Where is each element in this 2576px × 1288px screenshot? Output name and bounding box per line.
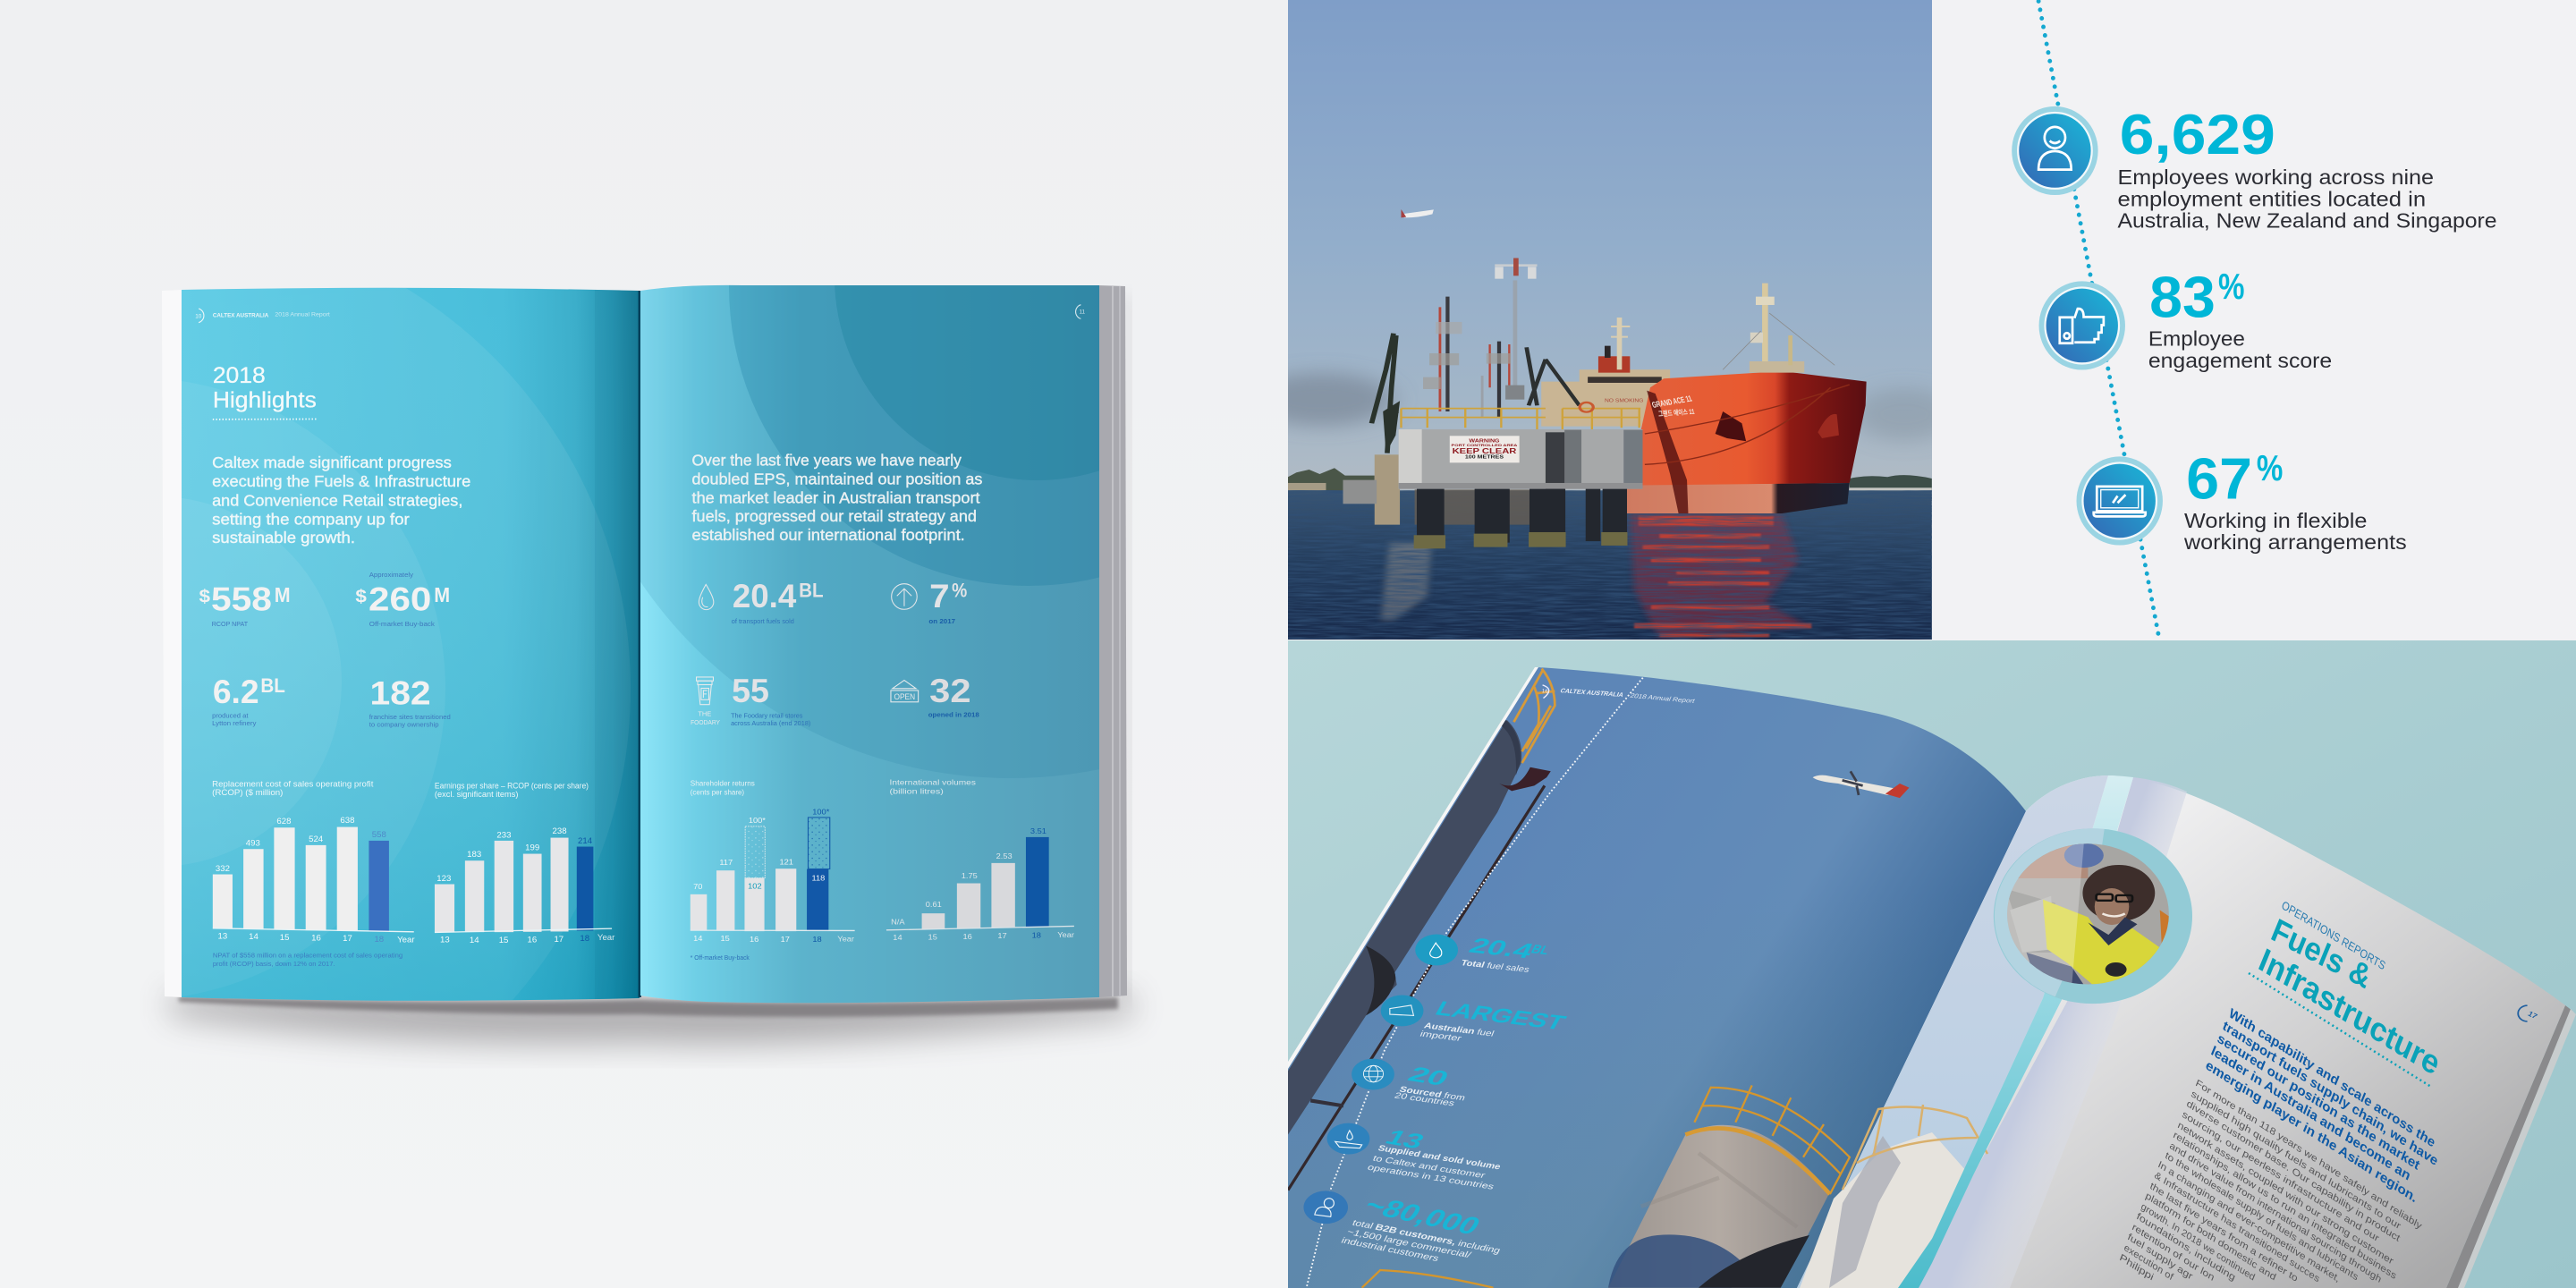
intro paragraph right: [692, 451, 982, 544]
chart: earnings per share: 233: [496, 831, 511, 839]
stat: $260M Off-market Buy-back: Approximately: [369, 571, 413, 579]
stat: 7% with arrow icon: %: [952, 580, 968, 602]
page header: CALTEX AUSTRALIA: [1559, 688, 1624, 699]
hull shadow of crane: [1647, 391, 1688, 513]
stat: 6.2BL: 6.2: [213, 673, 259, 710]
title: 2018 Highlights: [213, 363, 317, 419]
horizon haze: [1250, 373, 1955, 441]
portrait circle: [1994, 828, 2192, 1004]
chart: replacement cost of sales operating profit: 17: [343, 934, 352, 943]
chart: international volumes: 3.51: [1030, 826, 1046, 835]
stat: 55 with Foodary icon: across Australia (end 2018): [731, 720, 810, 727]
chart: replacement cost of sales operating profit: 13: [218, 932, 227, 940]
icon: open sign: [891, 681, 919, 702]
stat: 32 with OPEN icon: OPEN: [894, 692, 915, 701]
stat: 13 countries: 13: [1381, 1126, 1428, 1154]
chart: shareholder returns: 70: [693, 882, 702, 891]
stat: 55 with Foodary icon: The Foodary retail stores: [731, 712, 803, 719]
lead paragraph: emerging player in the Asian region.: [2203, 1058, 2419, 1206]
pipeline cylinder: [1288, 720, 1521, 1135]
stat: 67% flexible working: Working in flexible: [2184, 510, 2367, 532]
stat: ~80,000 customers: industrial customers: [1339, 1236, 1441, 1264]
panel: magazine spread on teal background: [1288, 640, 2576, 1288]
page surface: [1797, 775, 2565, 1288]
stat: $558M RCOP NPAT: RCOP NPAT: [212, 620, 249, 628]
lead paragraph: secured our position as the market: [2215, 1031, 2422, 1174]
ship superstructure: [1541, 318, 1670, 427]
body text: growth. In 2018 we continued: [2140, 1201, 2257, 1284]
dotted white line: [1307, 674, 1645, 1288]
heading: Fuels & Infrastructure: Fuels &: [2267, 911, 2377, 996]
panel: right page blue: [640, 284, 1099, 1004]
intro paragraph left: Caltex made significant progress: [212, 453, 452, 471]
water ripple texture: [1288, 490, 1932, 641]
body text: For more than 118 years we have safely and reliably: [2194, 1078, 2424, 1233]
title: 2018 Highlights: Highlights: [213, 387, 317, 412]
stat: 7% with arrow icon: [892, 577, 968, 625]
stat: 182: franchise sites transitioned: [369, 713, 451, 721]
stat: 7% with arrow icon: on 2017: [928, 617, 955, 625]
stat: $558M RCOP NPAT: [199, 580, 291, 628]
icon: water drop: [699, 584, 714, 610]
chart: international volumes: 18: [1032, 931, 1041, 939]
body text: In a changing and ever-competitive market,: [2157, 1159, 2341, 1284]
chart: shareholder returns: (cents per share): [691, 788, 744, 796]
right magazine page: [1797, 775, 2576, 1288]
chart: replacement cost of sales operating profit: [212, 780, 415, 968]
stat: 32 with OPEN icon: [891, 672, 979, 719]
storage tank: [1362, 1085, 1850, 1288]
chart: shareholder returns: 16: [750, 935, 758, 944]
intro paragraph right: fuels, progressed our retail strategy and: [692, 507, 977, 525]
sky: [1288, 0, 1932, 501]
jetty lighting pole: [1495, 258, 1537, 387]
chart: earnings per share: [435, 782, 614, 945]
left page upper content: [195, 309, 470, 729]
chart: earnings per share: 14: [470, 936, 479, 945]
stat: $260M Off-market Buy-back: Off-market Buy-back: [369, 620, 435, 628]
panel: left page blue: [182, 288, 640, 1001]
lead paragraph: With capability and scale across the: [2226, 1006, 2437, 1151]
body text: foundations, including: [2135, 1211, 2237, 1284]
stat: LARGEST: Australian fuel: [1423, 1021, 1496, 1038]
chart: shareholder returns: 14: [693, 934, 702, 943]
chart: shareholder returns: 15: [721, 934, 730, 943]
chart: international volumes: International volumes: [890, 778, 976, 787]
jetty piles: [1414, 489, 1627, 548]
body text: retention of our lon: [2131, 1222, 2216, 1284]
stat: 83% engagement: 83: [2149, 265, 2216, 330]
stat: 55 with Foodary icon: [691, 672, 810, 727]
intro paragraph left: sustainable growth.: [212, 529, 355, 547]
red valve: [1499, 767, 1551, 791]
page edge stack: [1098, 285, 1127, 997]
chart: earnings per share: 123: [436, 874, 451, 883]
chart: earnings per share: 183: [467, 850, 481, 859]
chart: international volumes: 0.61: [926, 900, 942, 909]
stat: 67% flexible working: [2077, 446, 2407, 554]
chart: shareholder returns: 121: [779, 858, 793, 866]
stat: 6.2BL: Lytton refinery: [212, 719, 257, 727]
open annual report spread: [158, 284, 1144, 1063]
chart: replacement cost of sales operating profit: 332: [216, 864, 230, 873]
stat: 67% flexible working: 67: [2186, 446, 2252, 512]
chart: shareholder returns: 100*: [749, 817, 766, 825]
body text: [2118, 1078, 2424, 1285]
sign: keep clear: WARNING: [1469, 439, 1500, 444]
body text: relationships, allow us to run an integrated business: [2172, 1130, 2398, 1282]
tanker ship: 그랜드 에이스 11: [1657, 407, 1695, 419]
tanker ship: GRAND ACE 11: [1651, 394, 1693, 410]
stat: 83% engagement: [2039, 265, 2332, 372]
book shadow: [170, 295, 1136, 1044]
stat: ~80,000 customers: [1303, 1191, 1502, 1264]
page block edge: [2446, 1005, 2572, 1288]
stat: 182: [369, 674, 451, 729]
ship superstructure: NO SMOKING: [1605, 398, 1643, 403]
icon: thumbs up: [2039, 281, 2125, 370]
intro paragraph right: the market leader in Australian transport: [692, 488, 980, 506]
chart: earnings per share: 214: [578, 836, 592, 845]
lead paragraph: transport fuels supply chain, we have: [2220, 1019, 2440, 1169]
ship hull: [1626, 371, 1867, 486]
chart: shareholder returns: * Off-market Buy-back: [691, 953, 750, 962]
stat: 20.4BL with drop icon: [699, 577, 824, 625]
body text: supplied high quality fuels and lubricants to our: [2190, 1089, 2402, 1233]
chart: earnings per share: 16: [527, 936, 537, 944]
stat: 55 with Foodary icon: FOODARY: [691, 718, 720, 726]
stat: 83% engagement: Employee: [2148, 327, 2245, 351]
chart: earnings per share: 199: [525, 843, 539, 852]
stat: 7% with arrow icon: 7: [929, 577, 950, 614]
page number 17: 17: [2526, 1009, 2539, 1021]
stat: $260M Off-market Buy-back: M: [434, 583, 450, 606]
stat: 6.2BL: [212, 673, 285, 727]
stat: LARGEST: LARGEST: [1431, 997, 1570, 1035]
stat: 55 with Foodary icon: 55: [732, 672, 769, 709]
body text: Philippi: [2118, 1252, 2155, 1284]
stat: 13 countries: [1327, 1123, 1502, 1191]
chart: international volumes: 17: [997, 931, 1007, 940]
pale storage tank through page: [1800, 1105, 1987, 1288]
stat: 32 with OPEN icon: 32: [929, 672, 971, 709]
stat: 13 countries: operations in 13 countries: [1366, 1163, 1496, 1191]
chart: shareholder returns: 18: [812, 935, 822, 944]
page header left: [195, 309, 330, 323]
chart: replacement cost of sales operating profit: 524: [309, 835, 323, 843]
intro paragraph right: doubled EPS, maintained our position as: [692, 470, 982, 487]
chart: replacement cost of sales operating profit: 638: [340, 817, 355, 825]
distant shoreline: [1288, 468, 1932, 502]
stat: 182: to company ownership: [369, 721, 439, 729]
body text: fuel supply agr: [2126, 1232, 2195, 1283]
stat: 6,629 employees: [2012, 103, 2497, 232]
stat: 20 countries: 20 countries: [1394, 1091, 1456, 1107]
stat: 20 countries: Sourced from: [1398, 1085, 1467, 1102]
chart: international volumes: 16: [962, 932, 972, 941]
title: 2018 Highlights: 2018: [213, 363, 266, 388]
chart: shareholder returns: 117: [719, 858, 733, 867]
stat: 32 with OPEN icon: opened in 2018: [928, 711, 979, 719]
sign: keep clear: KEEP CLEAR: [1453, 447, 1517, 455]
stat: 67% flexible working: working arrangements: [2183, 531, 2407, 554]
stat: 20.4BL: BL: [1529, 943, 1552, 958]
stat: 13 countries: to Caltex and customer: [1371, 1154, 1487, 1180]
sign: keep clear: 100 METRES: [1465, 455, 1504, 460]
chart: replacement cost of sales operating profit: 15: [280, 933, 290, 942]
sign: keep clear: PORT CONTROLLED AREA: [1452, 444, 1518, 448]
body text: & Infrastructure has transitioned succes: [2153, 1170, 2321, 1284]
stat: 55 with Foodary icon: THE: [698, 710, 711, 718]
chart: earnings per share: 13: [440, 936, 450, 944]
stat: 13 countries: Supplied and sold volume: [1377, 1144, 1502, 1171]
yellow ladder cage: [1513, 669, 1555, 763]
chart: earnings per share: 238: [552, 826, 567, 835]
teal band: [1898, 775, 2133, 1288]
tanker ship: [1541, 284, 1867, 513]
page number 17: [2518, 1005, 2539, 1021]
chart: international volumes: 1.75: [962, 871, 978, 880]
small pipe: [1288, 785, 1545, 1190]
intro paragraph right: Over the last five years we have nearly: [692, 451, 962, 469]
aeroplane: [1813, 771, 1909, 798]
stat: 6,629 employees: employment entities located in: [2117, 188, 2426, 210]
chart: international volumes: Year: [1057, 930, 1074, 939]
chart: replacement cost of sales operating profit: (RCOP) ($ million): [212, 788, 283, 798]
left page white edge: [1288, 667, 1542, 1072]
stat: ~80,000 customers: ~80,000: [1359, 1191, 1486, 1241]
deck railing: [1401, 409, 1640, 429]
stat: $558M RCOP NPAT: 558: [211, 580, 272, 618]
page number right: [1076, 305, 1086, 318]
stat: $260M Off-market Buy-back: $: [355, 586, 367, 606]
body text: execution of: [2123, 1242, 2174, 1283]
stat: 6,629 employees: Employees working across nine: [2117, 166, 2434, 189]
dotted timeline: [2038, 1, 2159, 640]
mooring lines: [1645, 385, 1850, 464]
stat: 6,629 employees: 6,629: [2120, 103, 2275, 166]
chart: replacement cost of sales operating profit: Year: [397, 936, 415, 944]
stat: 20.4BL with drop icon: 20.4: [733, 577, 797, 614]
section label: operations reports: OPERATIONS REPORTS: [2280, 898, 2387, 973]
chart: replacement cost of sales operating profit: profit (RCOP) basis, down 12% on 2017.: [213, 960, 335, 968]
lead paragraph: [2203, 1006, 2440, 1206]
body text: network assets, coupled with our strong customer: [2176, 1120, 2395, 1267]
chart: replacement cost of sales operating profit: 558: [372, 831, 386, 839]
chart: earnings per share: Earnings per share – RCOP (cents per share): [435, 782, 589, 792]
stat: 83% engagement: %: [2218, 267, 2244, 307]
sign: keep clear: [1450, 436, 1520, 462]
chart: international volumes: [886, 778, 1074, 942]
body text: the last five years from a refiner to: [2148, 1181, 2300, 1284]
intro paragraph right: established our international footprint.: [692, 526, 965, 544]
right page upper content: [691, 305, 1086, 727]
chart: replacement cost of sales operating profit: 14: [249, 932, 258, 941]
background: left mockup: [0, 0, 1288, 1288]
intro paragraph left: and Convenience Retail strategies,: [212, 491, 462, 509]
page header left: CALTEX AUSTRALIA: [213, 313, 269, 319]
stat: $558M RCOP NPAT: $: [199, 586, 210, 606]
concrete platform: [1343, 429, 1642, 534]
stat: LARGEST: [1381, 995, 1570, 1043]
stat: $260M Off-market Buy-back: 260: [369, 580, 431, 618]
body text: diverse customer base. Our capability in product: [2185, 1098, 2402, 1244]
chart: shareholder returns: 100*: [812, 808, 830, 816]
chart: earnings per share: 17: [554, 935, 564, 944]
chart: replacement cost of sales operating profit: 493: [246, 839, 260, 847]
loading arms and stacks: [1371, 297, 1580, 453]
body text: to the wholesale supply of fuels and lubricants: [2164, 1150, 2360, 1283]
stat: 20.4BL: [1415, 935, 1552, 974]
chart: shareholder returns: [691, 779, 855, 962]
left page white edge: [162, 290, 182, 997]
icon: Foodary cup: [697, 677, 713, 705]
chart: shareholder returns: 102: [748, 882, 762, 890]
body text: platform for both domestic and: [2144, 1191, 2277, 1284]
body text: and drive value from international sourcing through: [2168, 1140, 2383, 1285]
icon: up arrow: [892, 584, 917, 609]
chart: international volumes: (billion litres): [890, 787, 944, 796]
photo bleed: [1797, 775, 2108, 1288]
chart: replacement cost of sales operating profit: Replacement cost of sales operating profit: [212, 780, 374, 789]
page header: 2018 Annual Report: [1629, 693, 1696, 705]
page header: 16: [1541, 689, 1548, 695]
stat: 67% flexible working: %: [2257, 449, 2283, 488]
chart: shareholder returns: Year: [837, 935, 854, 943]
stat: 20.4BL with drop icon: BL: [799, 580, 824, 602]
spine: [639, 291, 641, 997]
stat: 182: 182: [369, 674, 431, 711]
stat: 83% engagement: engagement score: [2148, 350, 2332, 372]
stat: $260M Off-market Buy-back: [355, 571, 450, 628]
chart: shareholder returns: 118: [812, 874, 825, 882]
page header left: 2018 Annual Report: [275, 312, 330, 318]
chart: replacement cost of sales operating profit: 16: [311, 934, 321, 942]
stat: 20.4BL with drop icon: of transport fuels sold: [732, 618, 794, 625]
chart: earnings per share: 18: [580, 934, 589, 943]
panel: tanker photo: [1250, 0, 1955, 641]
page header: [1541, 685, 1696, 705]
stat: 6.2BL: BL: [260, 674, 285, 697]
intro paragraph left: setting the company up for: [212, 510, 410, 528]
chart: international volumes: N/A: [891, 918, 905, 926]
water: [1288, 490, 1932, 641]
heading: Fuels & Infrastructure: Infrastructure: [2254, 940, 2445, 1082]
stat: 6,629 employees: Australia, New Zealand and Singapore: [2117, 209, 2497, 232]
chart: replacement cost of sales operating profit: NPAT of $558 million on a replacement cost of sales operating: [213, 952, 402, 959]
stat: $558M RCOP NPAT: M: [275, 583, 291, 606]
left magazine page: sky photo: [1288, 662, 2039, 1288]
stat: LARGEST: importer: [1419, 1030, 1462, 1043]
water reflection: [1288, 490, 1932, 641]
lead paragraph: leader in Australia and become an: [2208, 1044, 2412, 1184]
icon: laptop: [2077, 456, 2163, 546]
body text: sourcing, our peerless infrastructure and our: [2181, 1109, 2381, 1245]
chart: international volumes: 14: [893, 933, 902, 942]
chart: shareholder returns: Shareholder returns: [691, 779, 755, 788]
stat: 20 countries: [1352, 1059, 1467, 1107]
intro paragraph left: [212, 453, 470, 547]
page header left: 10: [195, 313, 202, 319]
icon: person: [2012, 106, 2098, 195]
chart: earnings per share: 15: [499, 936, 508, 945]
lavender band: [1905, 777, 2187, 1288]
chart: replacement cost of sales operating profit: 18: [374, 935, 384, 944]
intro paragraph left: executing the Fuels & Infrastructure: [212, 472, 470, 490]
chart: earnings per share: (excl. significant items): [435, 790, 518, 800]
chart: shareholder returns: 17: [781, 935, 790, 944]
chart: international volumes: 2.53: [996, 852, 1013, 860]
stat: ~80,000 customers: ~1,500 large commercial/: [1345, 1227, 1472, 1260]
chart: replacement cost of sales operating profit: 628: [276, 817, 291, 826]
anchor: [1716, 411, 1746, 441]
stat: ~80,000 customers: total B2B customers, including: [1351, 1218, 1502, 1256]
stat: 20.4BL: 20.4: [1465, 935, 1538, 963]
stat: 20.4BL: Total fuel sales: [1460, 958, 1531, 974]
chart: earnings per share: Year: [597, 933, 614, 942]
page number right: 11: [1080, 309, 1086, 315]
forward mast: [1723, 284, 1835, 373]
panel: employee statistics: [1932, 0, 2576, 640]
aeroplane in sky: [1401, 209, 1434, 217]
stat: 20 countries: 20: [1403, 1063, 1453, 1090]
chart: international volumes: 15: [928, 933, 937, 941]
stat: 6.2BL: produced at: [212, 711, 249, 719]
